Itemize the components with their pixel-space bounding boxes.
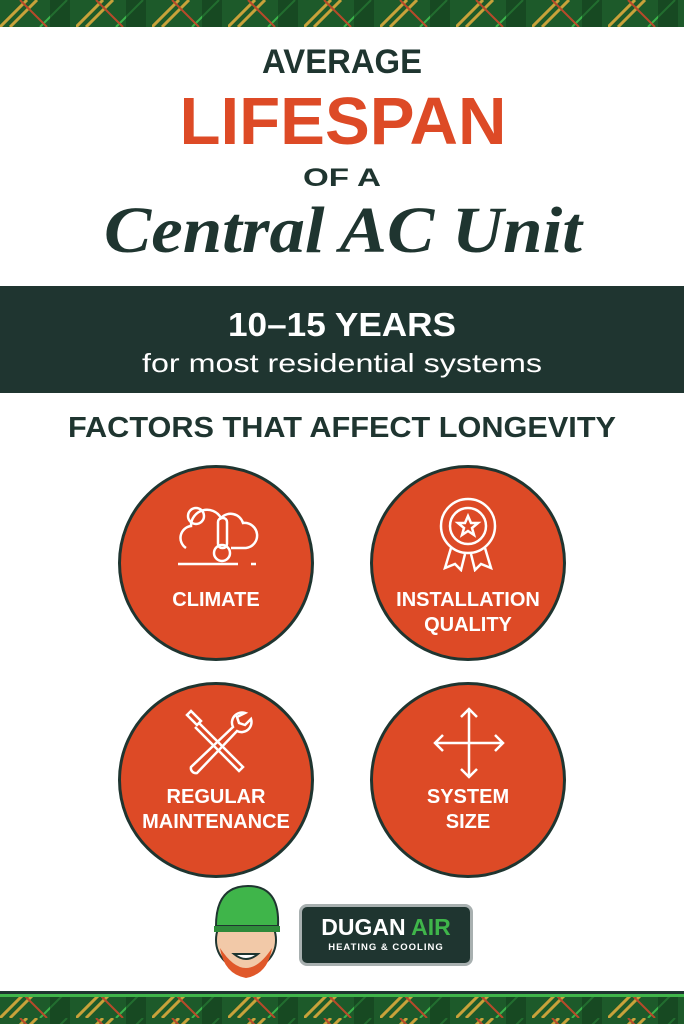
icon: cloud thermometer — [178, 506, 258, 566]
factor: installation quality: INSTALLATION — [396, 589, 540, 611]
factor: system size: SYSTEM — [427, 786, 509, 808]
top plaid band — [0, 0, 684, 27]
title: Central AC Unit — [104, 194, 584, 267]
heading: factors: FACTORS THAT AFFECT LONGEVITY — [68, 412, 616, 444]
factor: installation quality — [370, 465, 566, 661]
title: OF A — [303, 164, 381, 192]
factor: system size: SIZE — [446, 811, 490, 833]
title: LIFESPAN — [180, 84, 506, 159]
logo: Dugan Air — [299, 904, 473, 966]
factor: regular maintenance: REGULAR — [167, 786, 265, 808]
icon: wrench and screwdriver — [185, 709, 253, 774]
logo: mascot — [214, 885, 280, 978]
title — [104, 43, 584, 267]
factor: system size — [370, 682, 566, 878]
factor: regular maintenance — [118, 682, 314, 878]
factor: climate: CLIMATE — [172, 589, 260, 611]
icon: four-way arrows — [433, 707, 505, 779]
banner: years: for most residential systems — [142, 348, 542, 378]
factor: regular maintenance: MAINTENANCE — [142, 811, 290, 833]
factor: installation quality: QUALITY — [424, 614, 512, 636]
banner: years: 10–15 YEARS — [228, 306, 456, 343]
banner: years — [0, 286, 684, 393]
title: AVERAGE — [262, 43, 422, 81]
logo: Dugan Air: DUGAN AIR — [321, 914, 451, 940]
factor: climate — [118, 465, 314, 661]
logo: Dugan Air: HEATING & COOLING — [328, 942, 444, 953]
icon: award badge — [440, 498, 496, 572]
bottom plaid band — [0, 991, 684, 1024]
